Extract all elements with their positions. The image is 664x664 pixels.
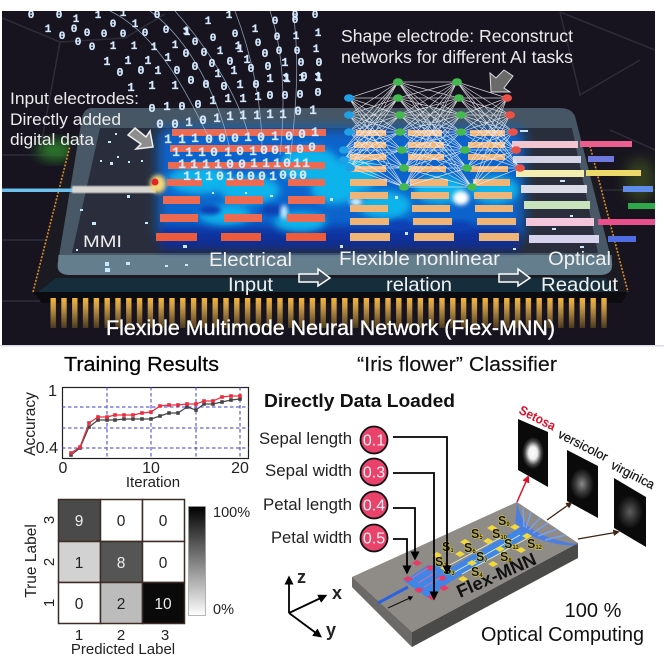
true label axis title: True Label bbox=[23, 524, 40, 598]
confusion matrix bbox=[23, 500, 250, 658]
axis tick labels: 0 bbox=[59, 460, 68, 477]
binary data stream: 111100111011 bbox=[178, 156, 310, 172]
gold pins bbox=[49, 298, 609, 328]
confusion matrix: 0 bbox=[117, 513, 126, 530]
feature: petal width bbox=[271, 524, 407, 572]
heading: shape electrode: Shape electrode: Reconstruct bbox=[341, 26, 573, 46]
output: virginica bbox=[578, 457, 658, 547]
electrode labels S1 to S12: 3 bbox=[451, 571, 455, 577]
electrode labels S1 to S12: 8 bbox=[508, 558, 512, 564]
xyz axes bbox=[289, 567, 342, 640]
blue optical field glow bbox=[158, 128, 524, 250]
axis tick labels: 20 bbox=[231, 460, 249, 477]
label: flexible nonlinear relation bbox=[340, 251, 500, 291]
xyz axes: x bbox=[332, 583, 342, 603]
binary data stream: 111010001000 bbox=[183, 168, 307, 184]
label: electrical input bbox=[210, 252, 291, 295]
y axis title: Accuracy bbox=[22, 392, 39, 456]
electrode labels S1 to S12: S bbox=[476, 550, 484, 564]
electrode labels S1 to S12: S bbox=[435, 555, 443, 569]
xyz axes: z bbox=[297, 567, 306, 587]
feature: petal width: Petal width bbox=[271, 529, 352, 547]
electrode labels S1 to S12: S bbox=[504, 537, 512, 551]
colour scale bar bbox=[188, 505, 250, 618]
arrow: input to relation bbox=[299, 269, 330, 286]
feature: sepal width: Sepal width bbox=[265, 462, 352, 480]
line chart: accuracy vs iteration bbox=[22, 383, 249, 491]
electrode labels S1 to S12: 11 bbox=[512, 545, 519, 551]
electrode labels S1 to S12: 7 bbox=[484, 558, 488, 564]
arrow: input electrodes bbox=[128, 128, 153, 149]
feature: petal length bbox=[263, 492, 415, 558]
input features bbox=[259, 426, 447, 598]
heading: directly data loaded: Directly Data Loaded bbox=[264, 390, 455, 411]
arrow: shape electrode bbox=[490, 70, 513, 92]
series: test accuracy bbox=[71, 399, 240, 455]
electrode labels S1 to S12: S bbox=[471, 527, 479, 541]
binary data stream: 111100010100 bbox=[104, 47, 323, 70]
feature: sepal width: 0.3 bbox=[363, 464, 385, 482]
series: train accuracy bbox=[71, 396, 240, 453]
binary data stream: 111010100100 bbox=[172, 140, 316, 160]
output: setosa: Setosa bbox=[517, 402, 559, 434]
feature: petal length: Petal length bbox=[263, 496, 352, 514]
feature: sepal width bbox=[265, 458, 434, 598]
matrix tick labels: 3 bbox=[161, 627, 169, 644]
axis tick labels: 1 bbox=[48, 383, 57, 400]
electrode labels S1 to S12: S bbox=[443, 563, 451, 577]
electrode labels S1 to S12: 5 bbox=[479, 535, 483, 541]
electrode labels S1 to S12: S bbox=[498, 514, 506, 528]
x axis title: Iteration bbox=[126, 474, 180, 491]
caption: optical computing bbox=[481, 600, 644, 646]
output: versicolor: versicolor bbox=[556, 426, 611, 464]
scattered data dots bbox=[76, 130, 584, 272]
binary data stream: 00000010101 bbox=[59, 25, 300, 53]
label: flexible nonlinear relation: relation bbox=[386, 274, 452, 296]
electrode labels S1 to S12: S bbox=[442, 540, 450, 554]
caption: optical computing: Optical Computing bbox=[481, 624, 644, 646]
electrode bars bbox=[156, 129, 326, 241]
binary data stream: 111000101101 bbox=[127, 70, 322, 95]
electrode labels S1 to S12: 9 bbox=[506, 522, 510, 528]
neural network lines bbox=[344, 82, 520, 187]
label: optical readout: Optical bbox=[548, 248, 611, 270]
chip base bbox=[47, 145, 602, 241]
heading: input electrodes: Directly added bbox=[10, 110, 121, 129]
predicted label axis title: Predicted Label bbox=[71, 641, 175, 658]
heading: input electrodes: Input electrodes: bbox=[10, 89, 139, 108]
heading: iris flower classifier: “Iris flower” Classifier bbox=[357, 353, 557, 376]
heading: shape electrode bbox=[342, 29, 573, 63]
electrode labels S1 to S12: 2 bbox=[443, 563, 447, 569]
neural network nodes bbox=[339, 78, 525, 191]
binary data stream: 001011111101 bbox=[156, 104, 317, 132]
confusion matrix: 0 bbox=[75, 596, 84, 613]
xyz axes: y bbox=[326, 620, 336, 640]
feature: sepal length bbox=[259, 426, 447, 572]
MMI input electrodes bbox=[403, 560, 449, 600]
colour scale bar: 0% bbox=[213, 602, 234, 618]
binary data stream: 010011110000 bbox=[148, 86, 322, 116]
matrix tick labels bbox=[41, 516, 169, 644]
label: MMI: MMI bbox=[83, 232, 122, 251]
feature: petal width: 0.5 bbox=[363, 530, 385, 548]
electrode labels S1 to S12: S bbox=[492, 527, 500, 541]
binary data stream: 00110100110 bbox=[28, 8, 318, 28]
input waveguide beam bbox=[2, 175, 166, 193]
confusion matrix: 0 bbox=[159, 513, 168, 530]
colour scale bar: 100% bbox=[213, 505, 250, 521]
label: electrical input: Input bbox=[228, 274, 274, 296]
electrode labels S1 to S12: S bbox=[464, 541, 472, 555]
output: versicolor bbox=[547, 426, 611, 520]
axis tick labels: 0.4 bbox=[36, 440, 58, 457]
electrode labels S1 to S12: 1 bbox=[450, 548, 454, 554]
device label: Flex-MNN bbox=[453, 549, 539, 602]
label: optical readout: Readout bbox=[541, 274, 619, 296]
caption: optical computing: 100 % bbox=[565, 600, 622, 622]
label: electrical input: Electrical bbox=[209, 249, 292, 271]
confusion matrix: 10 bbox=[154, 596, 172, 613]
label: flexible nonlinear relation: Flexible nonlinear bbox=[339, 248, 501, 270]
matrix tick labels: 3 bbox=[41, 516, 58, 524]
matrix tick labels: 2 bbox=[117, 627, 125, 644]
confusion matrix: 2 bbox=[117, 596, 125, 613]
panel title: Flexible Multimode Neural Network (Flex-MNN) bbox=[106, 317, 555, 340]
matrix tick labels: 1 bbox=[75, 627, 83, 644]
flex-mnn device bbox=[352, 502, 578, 647]
binary data stream: 111000101001 bbox=[164, 125, 319, 147]
heading: input electrodes bbox=[10, 89, 139, 149]
binary data stream: 0011110110001 bbox=[75, 37, 320, 58]
output: setosa bbox=[517, 402, 559, 502]
feature: sepal length: 0.1 bbox=[363, 432, 385, 450]
input waveguide bbox=[378, 587, 408, 603]
matrix tick labels: 1 bbox=[41, 599, 58, 607]
output: virginica: virginica bbox=[609, 457, 658, 492]
electrode labels S1 to S12: 12 bbox=[535, 545, 543, 551]
electrode labels S1 to S12: S bbox=[500, 550, 508, 564]
arrow: relation to readout bbox=[499, 269, 530, 286]
axis tick labels bbox=[36, 383, 249, 477]
label: optical readout bbox=[542, 251, 618, 291]
heading: training results: Training Results bbox=[64, 353, 219, 376]
confusion matrix: 0 bbox=[159, 555, 168, 572]
axis tick labels: 10 bbox=[142, 460, 160, 477]
heading: input electrodes: digital data bbox=[10, 130, 95, 149]
electrode labels S1 to S12 bbox=[435, 514, 543, 579]
feature: sepal length: Sepal length bbox=[259, 430, 352, 448]
matrix tick labels: 2 bbox=[41, 558, 58, 566]
electrode labels S1 to S12: S bbox=[527, 537, 535, 551]
electrode labels S1 to S12: S bbox=[471, 565, 479, 579]
confusion matrix: 9 bbox=[75, 513, 83, 530]
confusion matrix: 1 bbox=[75, 555, 83, 572]
glass plate bbox=[58, 108, 612, 275]
feature: petal length: 0.4 bbox=[363, 498, 385, 514]
dashed chip edges bbox=[33, 146, 628, 292]
binary data stream bbox=[28, 8, 323, 184]
panel: Flex-MNN chip illustration bbox=[2, 8, 656, 345]
waveguide mesh bbox=[404, 525, 535, 598]
electrode labels S1 to S12: 10 bbox=[500, 535, 508, 541]
electrode labels S1 to S12: 6 bbox=[472, 549, 476, 555]
heading: shape electrode: networks for different AI tasks bbox=[341, 47, 573, 67]
output fan bbox=[515, 502, 578, 545]
electrode labels S1 to S12: 4 bbox=[479, 573, 483, 579]
confusion matrix: 8 bbox=[117, 555, 125, 572]
binary data stream: 0010001100111 bbox=[117, 58, 323, 85]
binary data stream: 100110110 bbox=[45, 15, 322, 41]
shape electrode pads bbox=[432, 524, 532, 582]
optical readout bars bbox=[512, 141, 655, 243]
